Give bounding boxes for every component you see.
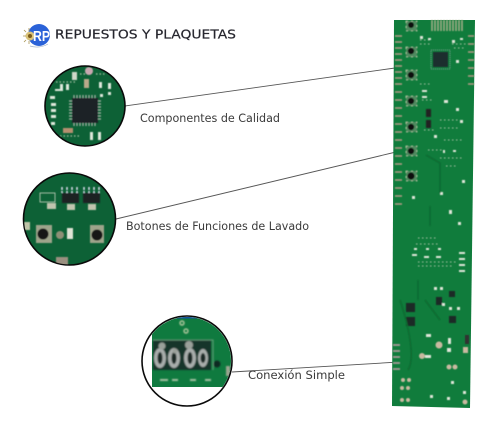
- circuit board: [392, 20, 475, 408]
- lower left pads: [393, 345, 400, 369]
- right edge connector pads: [468, 36, 474, 84]
- white and tan components: [412, 36, 466, 400]
- logo: [23, 24, 50, 47]
- dark traces: [400, 155, 440, 370]
- small black parts: [426, 109, 431, 117]
- IC chip: [433, 52, 448, 67]
- label: components: Componentes de Calidad: [140, 112, 280, 125]
- inset circle: quality components: [45, 66, 125, 146]
- title: REPUESTOS Y PLAQUETAS: [55, 26, 236, 42]
- top connector pads: [432, 20, 462, 31]
- left edge connector pads: [395, 36, 402, 204]
- logo: RP: [33, 28, 50, 45]
- push buttons: [406, 21, 417, 181]
- inset circle: wash function buttons: [24, 173, 116, 265]
- leader line: buttons: [116, 152, 396, 219]
- leader line: connection: [232, 361, 416, 372]
- fine component pattern: [416, 40, 466, 266]
- label: connection: Conexión Simple: [248, 369, 345, 382]
- inset circle: simple connection: [142, 316, 232, 406]
- label: buttons: Botones de Funciones de Lavado: [126, 220, 309, 233]
- leader line: components: [125, 68, 395, 106]
